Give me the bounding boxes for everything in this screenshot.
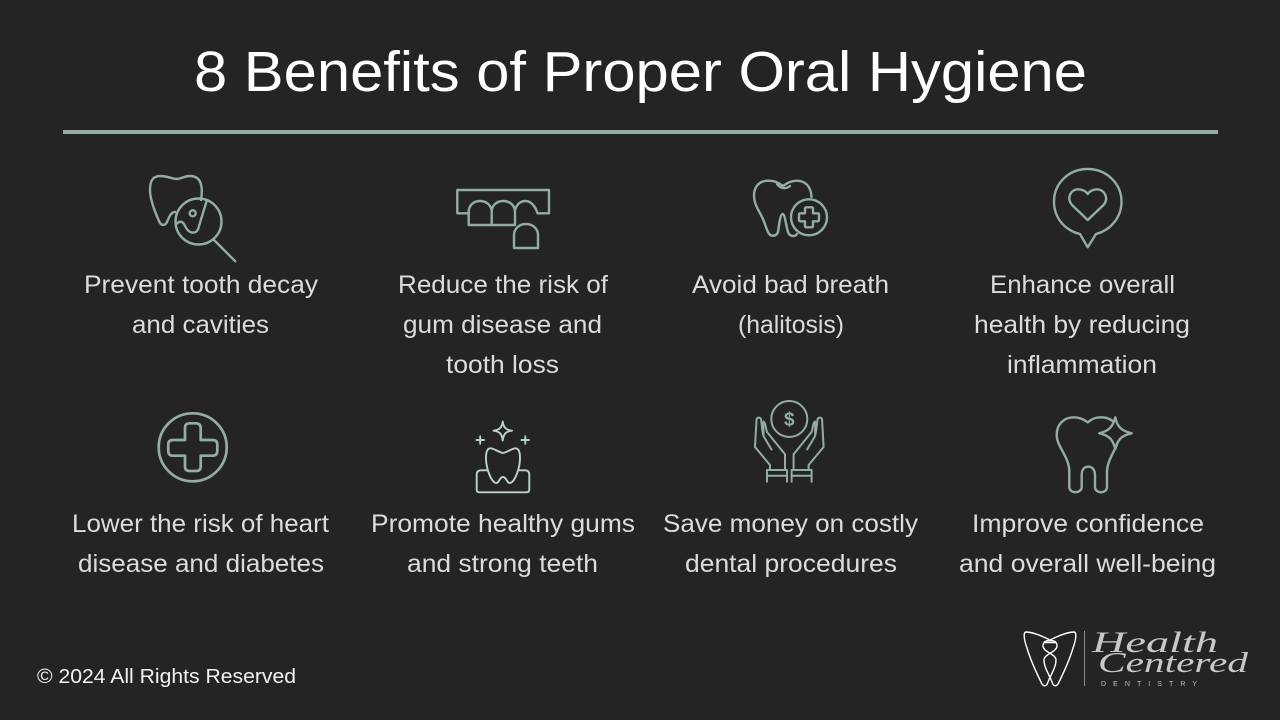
- copyright footer: © 2024 All Rights Reserved: [37, 666, 296, 688]
- wordmark: Health: [1090, 626, 1218, 659]
- icon: logo tooth mark: [1024, 632, 1076, 686]
- benefit text: [371, 510, 635, 578]
- benefit text: and cavities: [132, 311, 269, 339]
- panel: promote healthy gums: [371, 422, 635, 578]
- benefit text: inflammation: [1007, 351, 1157, 379]
- wordmark: DENTISTRY: [1101, 681, 1197, 688]
- benefit text: (halitosis): [738, 311, 844, 339]
- icon: tooth with plus badge: [754, 181, 827, 236]
- benefit text: Reduce the risk of: [398, 271, 608, 299]
- benefit text: health by reducing: [974, 311, 1190, 339]
- benefit text: and overall well-being: [959, 550, 1216, 578]
- benefit text: and strong teeth: [407, 550, 598, 578]
- benefit text: [974, 271, 1190, 379]
- icon: hands holding coin: [755, 401, 824, 482]
- logo: Health Centered Dentistry: [1024, 626, 1249, 688]
- benefit text: Promote healthy gums: [371, 510, 635, 538]
- benefit text: [398, 271, 608, 379]
- icon: sparkling tooth in gum: [476, 422, 529, 492]
- icon: teeth with missing tooth: [457, 190, 549, 248]
- benefit text: Lower the risk of heart: [72, 510, 329, 538]
- benefit text: Avoid bad breath: [692, 271, 889, 299]
- icon: medical cross in circle: [159, 413, 227, 481]
- benefit text: Save money on costly: [663, 510, 919, 538]
- benefit text: Improve confidence: [972, 510, 1204, 538]
- panel: lower heart disease risk: [72, 413, 329, 578]
- panel: improve confidence: [959, 417, 1216, 578]
- benefit text: Prevent tooth decay: [84, 271, 319, 299]
- panel: prevent tooth decay: [84, 176, 319, 339]
- panel: enhance overall health: [974, 169, 1190, 379]
- benefit text: dental procedures: [685, 550, 897, 578]
- icon: tooth with magnifying glass: [150, 176, 235, 261]
- benefit text: [663, 510, 919, 578]
- panel: avoid bad breath: [692, 181, 889, 339]
- icon: hands holding coin: $: [784, 410, 795, 430]
- benefit text: [692, 271, 889, 339]
- benefit text: Enhance overall: [990, 271, 1175, 299]
- benefit text: [72, 510, 329, 578]
- panel: save money: [663, 401, 919, 578]
- icon: tooth with sparkle: [1057, 417, 1132, 492]
- benefit text: disease and diabetes: [78, 550, 324, 578]
- benefit text: [84, 271, 319, 339]
- benefit text: gum disease and: [403, 311, 602, 339]
- title: 8 Benefits of Proper Oral Hygiene: [194, 40, 1087, 104]
- icon: heart speech bubble: [1054, 169, 1122, 247]
- wordmark: Centered: [1098, 648, 1249, 679]
- benefit text: tooth loss: [446, 351, 559, 379]
- wordmark: [1090, 626, 1249, 688]
- benefit text: [959, 510, 1216, 578]
- panel: reduce gum disease: [398, 190, 608, 379]
